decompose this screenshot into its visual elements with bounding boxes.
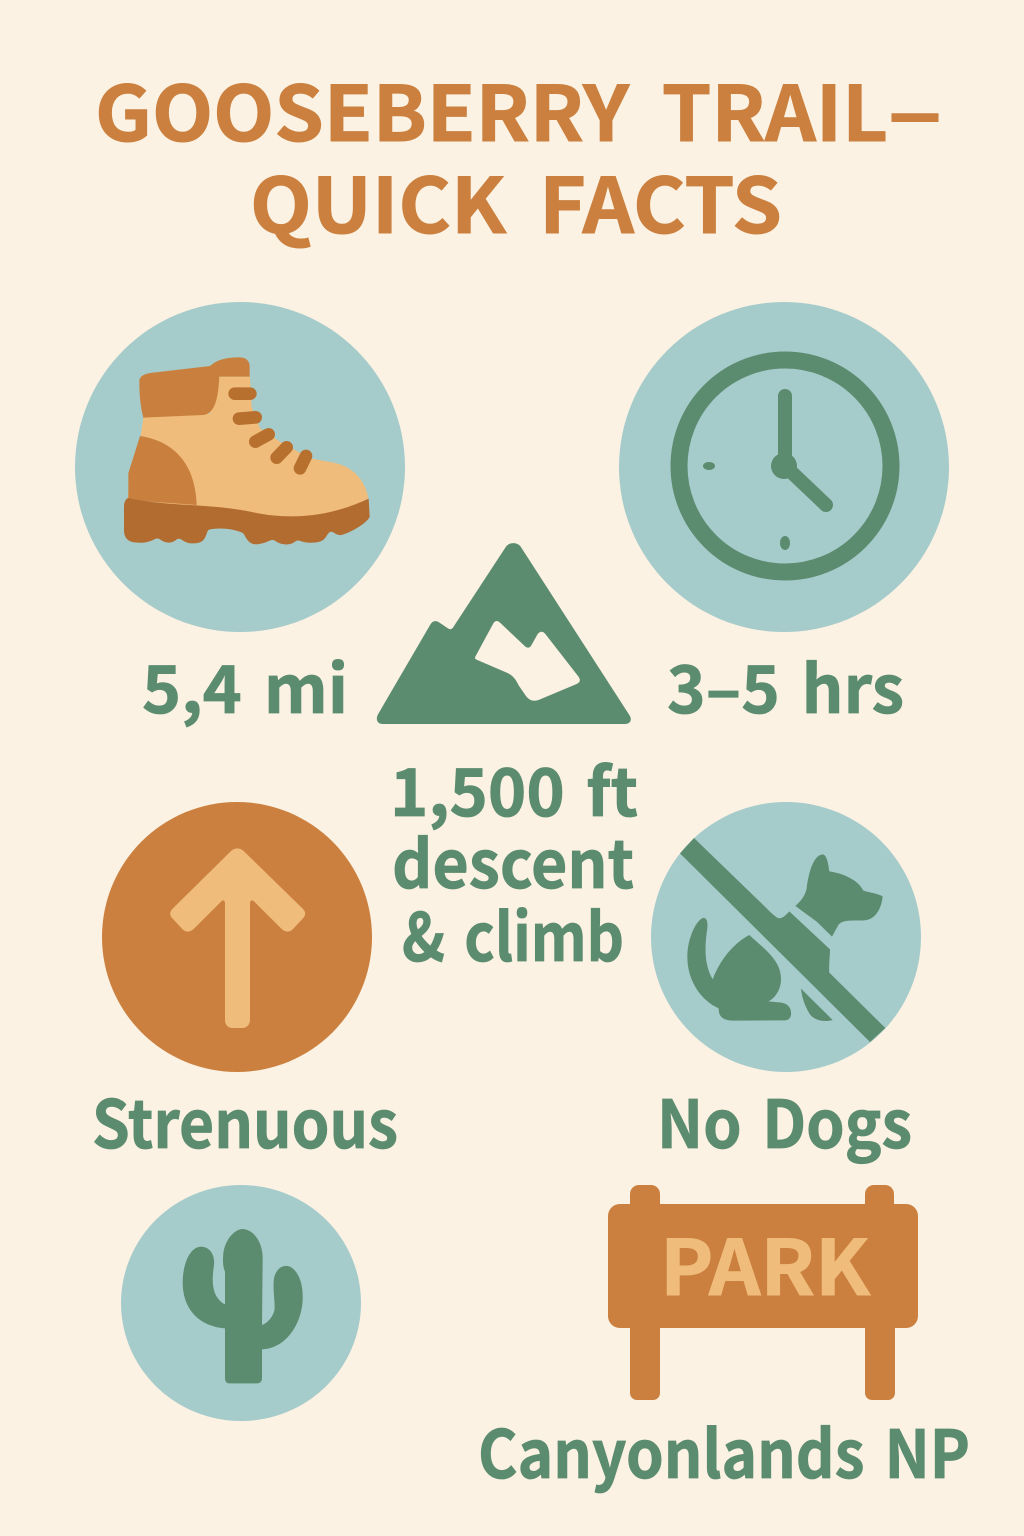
- label: park name: Canyonlands NP: [478, 1402, 970, 1498]
- label: difficulty: Strenuous: [92, 1072, 398, 1168]
- icon: park sign: [608, 1185, 918, 1400]
- icon: cactus in circle: [121, 1185, 361, 1421]
- label: duration: 3–5 hrs: [667, 637, 904, 733]
- label: elevation: [390, 740, 638, 981]
- title: [95, 53, 939, 255]
- label: elevation: 1,500 ft: [390, 740, 638, 836]
- title: GOOSEBERRY TRAIL: [95, 53, 888, 163]
- title: —: [891, 75, 939, 147]
- label: elevation: & climb: [402, 885, 624, 981]
- icon: no dogs: [651, 802, 921, 1072]
- label: distance: 5,4 mi: [142, 637, 348, 733]
- icon: clock in circle: [619, 302, 949, 632]
- icon: mountain: [377, 543, 631, 724]
- title: QUICK FACTS: [250, 145, 782, 255]
- icon: difficulty arrow: [102, 802, 372, 1072]
- icon: hiking boot in circle: [75, 302, 405, 632]
- icon: park sign: PARK: [660, 1207, 871, 1317]
- label: dog policy: No Dogs: [657, 1072, 912, 1168]
- label: elevation: descent: [392, 812, 634, 908]
